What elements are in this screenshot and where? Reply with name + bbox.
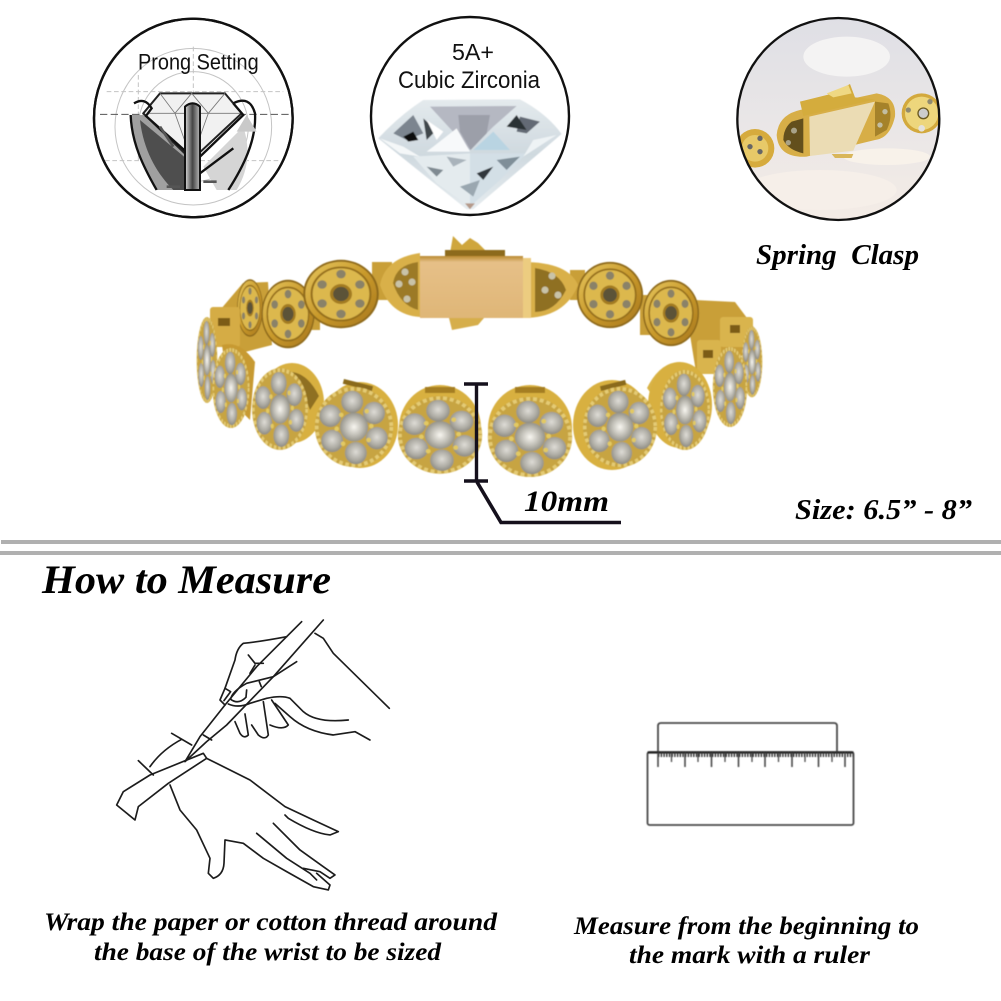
- dimension marker: 10mm: 10mm: [524, 485, 609, 518]
- label: size range: Size: 6.5” - 8”: [795, 495, 972, 526]
- illustration: ruler measuring strip: [648, 723, 854, 825]
- caption: wrap instruction: Wrap the paper or cotton thread around: [44, 909, 498, 936]
- back links: [237, 260, 699, 348]
- caption: wrap instruction: [44, 909, 498, 966]
- icon: spring clasp badge: [736, 18, 942, 220]
- icon: cubic zirconia badge: 5A+: [452, 39, 494, 65]
- caption: ruler instruction: Measure from the beginning to: [573, 913, 919, 940]
- icon: cubic zirconia badge: Cubic Zirconia: [398, 67, 541, 94]
- icon: cubic zirconia badge: [371, 17, 569, 215]
- section divider: [0, 540, 1001, 555]
- caption: wrap instruction: the base of the wrist to be sized: [94, 939, 442, 966]
- caption: ruler instruction: [573, 913, 919, 969]
- diamond: [378, 99, 562, 209]
- side connectors: [210, 307, 753, 374]
- side gold mass: [215, 262, 756, 372]
- clasp: [380, 236, 578, 330]
- bracelet: [197, 236, 762, 477]
- outer side links: [197, 317, 762, 428]
- illustration: wrapping paper around wrist: [117, 620, 389, 890]
- dimension marker: 10mm: [464, 384, 621, 522]
- main front links: [252, 368, 710, 477]
- heading: how to measure: How to Measure: [41, 557, 331, 602]
- label: spring clasp: Spring Clasp: [756, 239, 919, 271]
- caption: ruler instruction: the mark with a ruler: [629, 942, 870, 969]
- collars behind main links: [260, 362, 712, 471]
- icon: prong setting badge: Prong Setting: [138, 49, 259, 74]
- icon: prong setting badge: [94, 19, 293, 217]
